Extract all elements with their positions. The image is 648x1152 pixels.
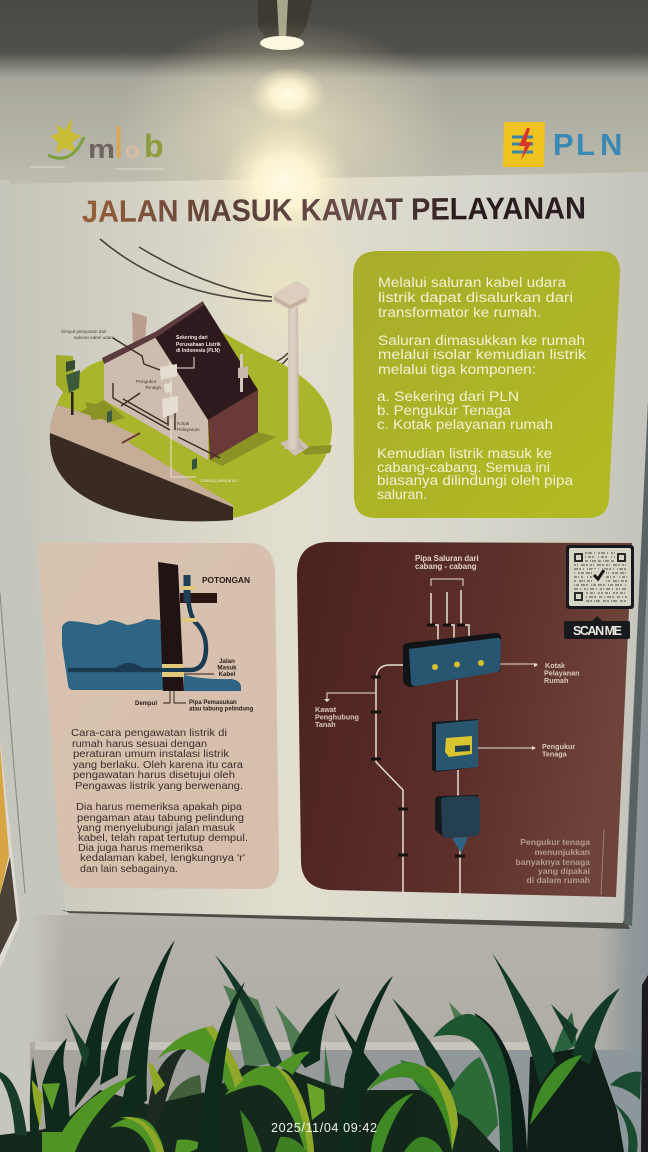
logo: PLN: L [576, 127, 595, 162]
pipes and wires [327, 579, 537, 895]
body text: Dia juga harus memeriksa [78, 843, 203, 854]
label: branch: Cabang pelayanan [200, 478, 238, 483]
body text: dan lain sebagainya. [80, 864, 178, 875]
info panel: overview: Melalui saluran kabel udara [378, 275, 567, 290]
label: service connection: Simpul pelayanan dari [61, 329, 106, 334]
label: service connection: saluran kabel udara [74, 335, 115, 340]
side exhibit panel at left edge [0, 593, 25, 968]
body text: yang berlaku. Oleh karena itu cara [73, 760, 243, 771]
label: house service box: Pelayanan [544, 668, 580, 678]
pole and insulator [238, 282, 309, 456]
scan me tag: SCAN ME [573, 624, 622, 638]
label: putty: Dempul [135, 701, 157, 707]
label: entry pipe: Pipa Pemasukan [189, 700, 237, 706]
info panel: overview: melalui tiga komponen: [378, 362, 536, 377]
cross-section diagram [62, 562, 241, 703]
logo: PLN: N [600, 127, 622, 162]
info panel: overview: saluran. [377, 487, 427, 502]
label: meter: Pengukur [542, 742, 575, 751]
label: POTONGAN: POTONGAN [202, 575, 250, 585]
body text: pengawatan harus disetujui oleh [73, 770, 235, 781]
body text: rumah harus sesuai dengan [72, 739, 207, 750]
tree and small boxes [56, 355, 197, 470]
label: house service box: Kotak [545, 661, 565, 670]
cable clamps [371, 625, 465, 856]
label: meter: Tenaga [542, 750, 568, 758]
logo: mlob [30, 118, 165, 169]
body text: kedalaman kabel, lengkungnya 'r' [80, 853, 245, 864]
logo: mlob: b [144, 128, 164, 164]
label: service box: Pelayanan [177, 427, 200, 433]
right edge post [641, 975, 648, 1152]
info panel: overview [353, 251, 620, 518]
grass foreground [0, 940, 641, 1152]
poster sheet [3, 172, 648, 929]
logo: mlob: m [88, 134, 115, 164]
note text: Pengukur tenaga [520, 837, 590, 847]
body text: yang menyelubungi jalan masuk [77, 823, 236, 834]
fuse box [435, 795, 480, 853]
body text: peraturan umum instalasi listrik [73, 749, 230, 760]
info panel: overview: listrik dapat disalurkan dari [378, 290, 573, 305]
QR code [566, 545, 634, 609]
info panel: overview: Saluran dimasukkan ke rumah [378, 333, 585, 348]
info panel: overview: melalui isolar kemudian listrik [378, 347, 586, 362]
house illustration [50, 239, 332, 521]
note text: yang dipakai [538, 866, 590, 876]
bottom dark mass [0, 1065, 500, 1152]
info panel: overview: a. Sekering dari PLN [377, 389, 519, 404]
lamp and glare [115, 0, 455, 380]
label: earth wire: Tanah [315, 720, 336, 729]
label: pipes: cabang - cabang [415, 562, 477, 571]
meter boxes and inner wiring [113, 338, 220, 477]
panel: wiring diagram [297, 542, 632, 897]
service box [403, 633, 501, 687]
dark blades [0, 940, 641, 1152]
label: fuse: Sekering dari [176, 335, 208, 341]
tall blade over leaves [197, 982, 245, 1152]
info panel: overview: Kemudian listrik masuk ke [377, 446, 552, 461]
label: entry pipe: atau tabung pelindung [189, 706, 254, 712]
scan me tag [564, 616, 630, 639]
label: cable entry: Jalan [219, 658, 235, 665]
body text: Pengawas listrik yang berwenang. [75, 781, 243, 792]
yellow-green highlights [32, 1026, 458, 1152]
title: JALAN MASUK KAWAT PELAYANAN [82, 190, 586, 229]
label: cable entry: Kabel [219, 671, 236, 678]
logo: PLN [503, 122, 622, 167]
translucent back leaves [160, 985, 577, 1152]
timestamp: 2025/11/04 09:42 [271, 1121, 377, 1135]
info panel: overview: transformator ke rumah. [378, 305, 541, 320]
wires from the grid [100, 239, 288, 375]
info panel: overview: c. Kotak pelayanan rumah [377, 417, 553, 432]
note text: banyaknya tenaga [515, 857, 590, 867]
label: meter: Tenaga [145, 385, 161, 391]
body text: kabel, telah rapat tertutup dempul. [78, 833, 248, 844]
label: earth wire: Kawat [315, 705, 337, 714]
body text: pengaman atau tabung pelindung [77, 813, 244, 824]
label: fuse: Perusahaan Listrik [176, 342, 221, 348]
ground disc [50, 320, 332, 521]
info panel: overview: biasanya dilindungi oleh pipa [377, 473, 574, 488]
label: fuse: di Indonesia (PLN) [176, 348, 220, 354]
label: pipes: Pipa Saluran dari [415, 554, 479, 563]
info panel: overview: b. Pengukur Tenaga [377, 403, 512, 418]
label: service box: Kotak [177, 421, 190, 427]
body text: Cara-cara pengawatan listrik di [71, 728, 227, 739]
panel: cross-section [38, 543, 279, 889]
label: house service box: Rumah [544, 676, 568, 685]
logo: mlob: o [125, 137, 140, 164]
logo: PLN: P [553, 127, 574, 162]
label: meter: Pengukur [136, 379, 157, 385]
info panel: overview: cabang-cabang. Semua ini [377, 460, 550, 475]
body text [71, 728, 248, 875]
label: earth wire: Penghubung [315, 712, 359, 722]
note text: menunjukkan [535, 847, 590, 857]
meter box [432, 719, 478, 772]
house walls and roof [102, 301, 258, 460]
label: cable entry: Masuk [217, 664, 237, 672]
green leaves [42, 1026, 582, 1152]
note text: di dalam rumah [526, 875, 590, 885]
body text: Dia harus memeriksa apakah pipa [76, 802, 242, 813]
